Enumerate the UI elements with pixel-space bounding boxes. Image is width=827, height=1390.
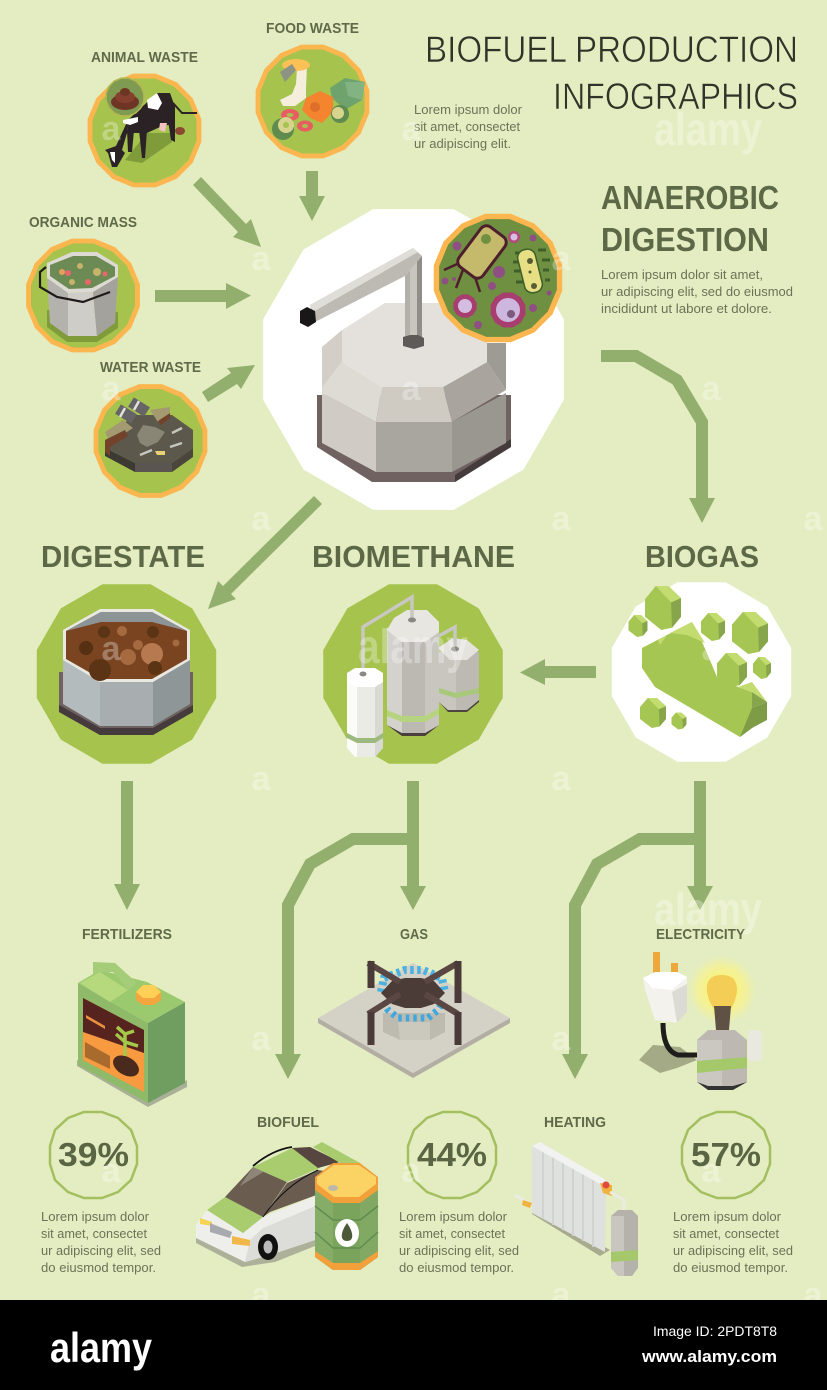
title: INFOGRAPHICS [553, 76, 798, 117]
heading: digestate: DIGESTATE [41, 539, 205, 574]
watermarks: a [552, 760, 572, 798]
icon: radiator and cylinder [515, 1142, 638, 1276]
watermarks: a [102, 110, 122, 148]
text: 57% description: do eiusmod tempor. [673, 1260, 788, 1275]
heading: anaerobic digestion: ANAEROBIC [601, 179, 779, 216]
text: anaerobic digestion description: Lorem ipsum dolor sit amet, [601, 267, 763, 282]
text: 39% description: Lorem ipsum dolor [41, 1209, 150, 1224]
watermarks: a [702, 370, 722, 408]
icon: barrel [315, 1163, 378, 1270]
stat: 44% [408, 1112, 496, 1198]
text: anaerobic digestion description: ur adipiscing elit, sed do eiusmod [601, 284, 793, 299]
text: 44% description [399, 1209, 519, 1275]
watermarks: a [252, 500, 272, 538]
arrow: biogas to electricity [687, 781, 713, 910]
heading: anaerobic digestion [601, 179, 779, 258]
intro text: Lorem ipsum dolor [414, 102, 523, 117]
heading: biomethane: BIOMETHANE [312, 539, 515, 574]
image id: Image ID: 2PDT8T8 [653, 1323, 777, 1339]
intro text: sit amet, consectet [414, 119, 520, 134]
icon: fertilizer canister [77, 962, 187, 1107]
panel: anaerobic digester [263, 209, 564, 510]
label: gas: GAS [400, 926, 428, 943]
text: 57% description [673, 1209, 793, 1275]
stat: 57% [682, 1112, 770, 1198]
icon: middle tank [363, 597, 439, 736]
text: 39% description [41, 1209, 161, 1275]
arrow: digester to digestate [208, 496, 322, 609]
icon: pipe [300, 248, 424, 349]
panel: digestate tank [37, 584, 216, 764]
stat: 44%: 44% [417, 1136, 487, 1173]
arrow: food waste to digester [299, 171, 325, 221]
watermarks: a [552, 1020, 572, 1058]
text: 44% description: Lorem ipsum dolor [399, 1209, 508, 1224]
watermarks: a [402, 110, 422, 148]
text: 44% description: sit amet, consectet [399, 1226, 505, 1241]
icon: left tank [347, 668, 383, 757]
icon: right tank [437, 627, 479, 712]
arrow: biomethane to gas [400, 781, 426, 910]
watermarks: a [402, 1152, 422, 1190]
label: electricity: ELECTRICITY [656, 926, 745, 943]
panel: biogas cloud [612, 582, 791, 762]
icon: plug and bulb [639, 952, 762, 1090]
text: 57% description: sit amet, consectet [673, 1226, 779, 1241]
watermarks: a [552, 500, 572, 538]
title [425, 29, 798, 117]
label: animal waste: ANIMAL WASTE [91, 49, 198, 66]
watermarks: a [252, 760, 272, 798]
label: organic mass: ORGANIC MASS [29, 214, 137, 231]
text: 39% description: do eiusmod tempor. [41, 1260, 156, 1275]
watermarks: a [702, 630, 722, 668]
arrow: water waste to digester [202, 365, 255, 402]
text: 39% description: sit amet, consectet [41, 1226, 147, 1241]
icon: gas bubbles [628, 586, 771, 730]
watermarks: alamy [358, 621, 468, 674]
label: fertilizers: FERTILIZERS [82, 926, 172, 943]
watermarks: a [102, 370, 122, 408]
watermarks: a [804, 1276, 824, 1314]
label: biofuel: BIOFUEL [257, 1114, 319, 1131]
watermarks: a [252, 1020, 272, 1058]
panel: biomethane tanks [323, 584, 503, 764]
watermarks: a [804, 500, 824, 538]
watermarks [102, 103, 824, 1314]
icon: car and barrel [196, 1142, 378, 1270]
panel: organic mass [26, 214, 140, 352]
watermarks: alamy [654, 883, 762, 935]
stat: 39% [50, 1112, 137, 1198]
logo: alamy: alamy [50, 1324, 153, 1371]
arrow: digestion to biogas [601, 356, 715, 523]
watermarks: a [252, 1276, 272, 1314]
panel: animal waste [88, 49, 201, 187]
text: 44% description: do eiusmod tempor. [399, 1260, 514, 1275]
intro text [414, 102, 523, 151]
label: water waste: WATER WASTE [100, 359, 201, 376]
footer bar [0, 1300, 827, 1390]
text: 39% description: ur adipiscing elit, sed [41, 1243, 161, 1258]
text: anaerobic digestion description [601, 267, 793, 316]
watermarks: a [552, 240, 572, 278]
panel: water waste [94, 359, 207, 498]
icon: poop inset [105, 77, 145, 117]
icon: bacteria inset [434, 214, 562, 342]
arrow: organic mass to digester [155, 283, 251, 309]
arrow: biogas to heating [562, 839, 700, 1079]
icon: gas burner [318, 961, 510, 1078]
arrow: animal waste to digester [193, 177, 261, 247]
watermarks: alamy [654, 103, 762, 155]
website: www.alamy.com [641, 1347, 777, 1366]
text: 57% description: ur adipiscing elit, sed [673, 1243, 793, 1258]
watermarks: a [552, 1276, 572, 1314]
watermarks: a [402, 370, 422, 408]
stat: 57%: 57% [691, 1136, 761, 1173]
arrow: biomethane to biofuel [275, 839, 413, 1079]
watermarks: a [252, 240, 272, 278]
label: heating: HEATING [544, 1114, 606, 1131]
watermarks: a [702, 1152, 722, 1190]
watermarks: a [102, 1152, 122, 1190]
arrow: digestate to fertilizers [114, 781, 140, 910]
intro text: ur adipiscing elit. [414, 136, 511, 151]
label: food waste: FOOD WASTE [266, 20, 359, 37]
text: 57% description: Lorem ipsum dolor [673, 1209, 782, 1224]
text: 44% description: ur adipiscing elit, sed [399, 1243, 519, 1258]
text: anaerobic digestion description: incididunt ut labore et dolore. [601, 301, 772, 316]
arrow: biogas to biomethane [520, 659, 596, 685]
panel: food waste [256, 20, 369, 158]
watermarks: a [102, 630, 122, 668]
stat: 39%: 39% [58, 1136, 129, 1173]
heading: biogas: BIOGAS [645, 539, 759, 574]
heading: anaerobic digestion: DIGESTION [601, 221, 769, 258]
